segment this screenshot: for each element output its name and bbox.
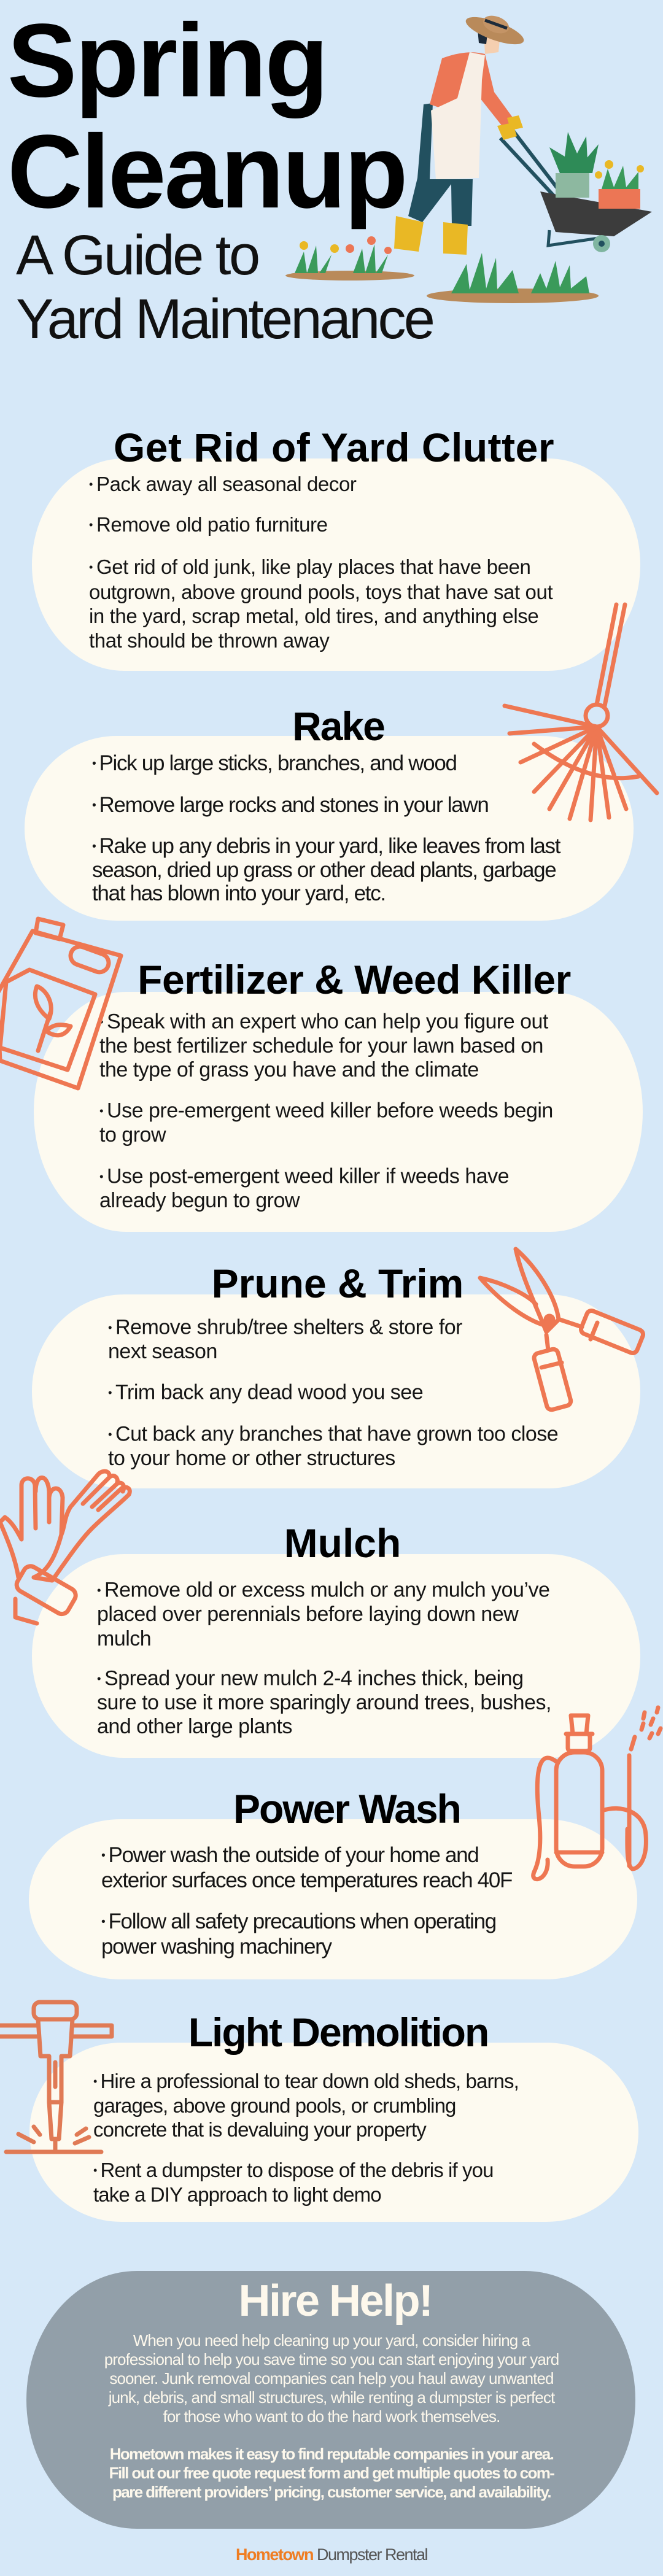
flowers left — [295, 236, 392, 273]
bullet 3: that has blown into your yard, etc. — [92, 881, 386, 905]
bullet 2 — [99, 1099, 553, 1147]
bullet 1: •Power wash the outside of your home and — [101, 1843, 478, 1867]
text: hometown call to action — [109, 2445, 554, 2501]
bullet 1: •Remove old or excess mulch or any mulch you’ve — [97, 1579, 549, 1602]
icon: rake — [505, 605, 657, 820]
bullet 2: sure to use it more sparingly around trees, bushes, — [97, 1691, 551, 1714]
bullet 1 — [93, 2070, 519, 2141]
text: rake bullets — [92, 751, 561, 905]
heading: Light Demolition: Light Demolition — [188, 2009, 488, 2055]
bullet 2 — [93, 2159, 494, 2206]
subtitle: Yard Maintenance: Yard Maintenance — [16, 288, 433, 350]
bullet 1: exterior surfaces once temperatures reach 40F — [101, 1868, 512, 1892]
icon: gloves — [0, 1471, 130, 1623]
bullet 2: •Spread your new mulch 2-4 inches thick, being — [97, 1667, 523, 1690]
heading: Get Rid of Yard Clutter: Get Rid of Yard Clutter — [114, 425, 554, 470]
heading: Mulch: Mulch — [284, 1520, 401, 1566]
wheelbarrow — [500, 130, 652, 252]
bullet 2: •Trim back any dead wood you see — [108, 1381, 423, 1404]
panel: Power Wash — [29, 1819, 637, 1979]
text: hire help paragraph: professional to help you save time so you can start enjoying your yard — [104, 2350, 559, 2369]
text: prune bullets — [108, 1316, 558, 1470]
bullet 2: •Remove old patio furniture — [89, 513, 328, 536]
bullet 3: •Rake up any debris in your yard, like leaves from last — [92, 834, 560, 858]
bullet 1: •Speak with an expert who can help you figure out — [99, 1010, 548, 1034]
bullet 1: placed over perennials before laying down new — [97, 1603, 518, 1626]
heading: Rake: Rake — [292, 703, 384, 749]
bullet 3 — [89, 555, 552, 652]
bullet 3: outgrown, above ground pools, toys that have sat out — [89, 581, 552, 603]
panel: Light Demolition — [29, 2043, 638, 2222]
bullet 2: •Use pre-emergent weed killer before weeds begin — [99, 1099, 553, 1123]
panel: Rake — [25, 736, 634, 921]
text: hire help paragraph: junk, debris, and small structures, while renting a dumpster is perfect — [109, 2388, 554, 2407]
bullet 1 — [97, 1579, 549, 1650]
bullet 3 — [92, 834, 561, 905]
bullet 3: •Cut back any branches that have grown too close — [108, 1423, 558, 1446]
text: power wash bullets — [101, 1843, 512, 1959]
bullet 3: already begun to grow — [99, 1189, 300, 1212]
footer logo: Hometown Dumpster Rental — [236, 2545, 427, 2564]
bullet 1: •Hire a professional to tear down old sheds, barns, — [93, 2070, 519, 2092]
bullet 3 — [99, 1165, 509, 1212]
bullet 2: power washing machinery — [101, 1935, 332, 1959]
text: hometown call to action: Fill out our free quote request form and get multiple quotes to com- — [109, 2464, 554, 2482]
bullet 1 — [101, 1843, 512, 1892]
title line: Cleanup: Cleanup — [7, 114, 406, 230]
grass clumps — [451, 253, 589, 293]
icon: fertilizer jug — [0, 919, 121, 1088]
text: demolition bullets — [93, 2070, 519, 2206]
panel: Hire Help — [26, 2271, 635, 2529]
bullet 3: to your home or other structures — [108, 1447, 395, 1470]
bullet 3: that should be thrown away — [89, 629, 329, 652]
bullet 3 — [108, 1423, 558, 1470]
title line: Spring: Spring — [7, 2, 327, 119]
bullet 1: the best fertilizer schedule for your lawn based on — [99, 1034, 543, 1058]
heading: Fertilizer & Weed Killer: Fertilizer & Weed Killer — [138, 957, 571, 1002]
text: hire help paragraph: for those who want to do the hard work themselves. — [163, 2407, 500, 2426]
icon: pressure sprayer — [533, 1708, 661, 1879]
text: hometown call to action: Hometown makes it easy to find reputable companies in your area. — [110, 2445, 553, 2463]
text: hometown call to action: pare different providers’ pricing, customer service, and availability. — [112, 2483, 551, 2501]
title — [7, 2, 433, 350]
bullet 1: •Pick up large sticks, branches, and wood — [92, 751, 457, 775]
text: mulch bullets — [97, 1579, 551, 1738]
bullet 2 — [97, 1667, 551, 1738]
panel: Fertilizer & Weed Killer — [34, 992, 643, 1232]
bullet 1: mulch — [97, 1627, 151, 1650]
text: hire help paragraph — [104, 2331, 559, 2426]
panel: Get Rid of Yard Clutter — [32, 458, 640, 671]
bullet 2: and other large plants — [97, 1715, 292, 1738]
bullet 1: •Remove shrub/tree shelters & store for — [108, 1316, 462, 1339]
gardener — [394, 12, 527, 255]
heading: Hire Help!: Hire Help! — [238, 2276, 432, 2326]
icon: jackhammer — [0, 2002, 112, 2152]
text: hire help paragraph: sooner. Junk removal companies can help you haul away unwanted — [109, 2369, 554, 2388]
bullet 3: in the yard, scrap metal, old tires, and anything else — [89, 605, 538, 627]
panel: Mulch — [32, 1554, 640, 1758]
bullet 1 — [108, 1316, 462, 1363]
bullet 3: •Get rid of old junk, like play places that have been — [89, 555, 530, 578]
bullet 2: •Remove large rocks and stones in your lawn — [92, 793, 489, 817]
text: fertilizer bullets — [99, 1010, 553, 1212]
bullet 2: •Rent a dumpster to dispose of the debris if you — [93, 2159, 494, 2181]
bullet 2 — [101, 1909, 496, 1959]
panel: Prune & Trim — [32, 1294, 640, 1488]
icon: pruning shears — [480, 1249, 645, 1411]
bullet 2: •Follow all safety precautions when operating — [101, 1909, 496, 1933]
bullet 1: garages, above ground pools, or crumbling — [93, 2094, 456, 2117]
bullet 1: concrete that is devaluing your property — [93, 2118, 426, 2141]
heading: Prune & Trim: Prune & Trim — [212, 1261, 463, 1306]
bullet 1: next season — [108, 1340, 217, 1363]
bullet 1: •Pack away all seasonal decor — [89, 473, 356, 495]
text: clutter bullets — [89, 473, 552, 652]
text: hire help paragraph: When you need help cleaning up your yard, consider hiring a — [133, 2331, 530, 2350]
bullet 3: season, dried up grass or other dead plants, garbage — [92, 858, 556, 882]
heading: Power Wash: Power Wash — [233, 1786, 460, 1831]
subtitle: A Guide to: A Guide to — [16, 224, 258, 287]
bullet 2: take a DIY approach to light demo — [93, 2183, 381, 2206]
ground mounds — [285, 271, 599, 303]
bullet 3: •Use post-emergent weed killer if weeds have — [99, 1165, 509, 1188]
bullet 1: the type of grass you have and the climate — [99, 1058, 479, 1081]
illustration: gardener with wheelbarrow — [285, 16, 652, 303]
bullet 1 — [99, 1010, 549, 1081]
bullet 2: to grow — [99, 1123, 166, 1147]
